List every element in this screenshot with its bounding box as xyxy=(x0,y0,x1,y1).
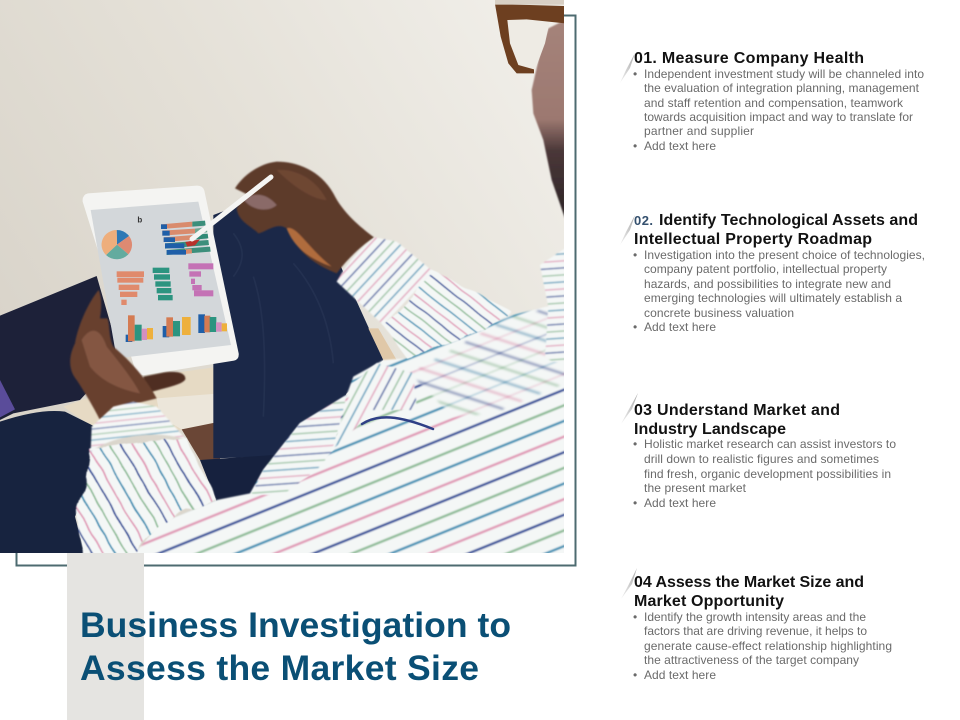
middle green bars xyxy=(153,268,173,300)
top bar chart xyxy=(161,221,211,255)
frame outline behind photo xyxy=(16,16,576,566)
body 02: Investigation into the present choice of technologies, xyxy=(644,248,925,262)
body 04: Add text here xyxy=(644,668,716,682)
stylus xyxy=(192,177,271,239)
slash accent 03 xyxy=(621,393,638,424)
body 01: and staff retention and compensation, teamwork xyxy=(644,96,904,110)
knuckle highlight xyxy=(82,331,140,393)
body 03: • xyxy=(633,437,637,451)
right hand holding stylus xyxy=(235,162,374,273)
heading 02: 02. xyxy=(634,213,653,228)
body 01: Add text here xyxy=(644,139,716,153)
body 03: Holistic market research can assist investors to xyxy=(644,437,896,451)
heading 01: 01. Measure Company Health xyxy=(634,50,864,67)
body 02: hazards, and possibilities to integrate new and xyxy=(644,277,891,291)
body 04: factors that are driving revenue, it helps to xyxy=(644,624,867,638)
photo: man using tablet xyxy=(0,0,565,555)
item 01: Measure Company Health xyxy=(620,50,924,153)
left hand holding tablet xyxy=(70,290,185,420)
body 01: • xyxy=(633,67,637,81)
upper left thigh xyxy=(0,276,120,420)
heading 03: Industry Landscape xyxy=(634,421,786,438)
tablet with charts xyxy=(83,186,239,375)
hand shape xyxy=(235,162,374,273)
trouser folds xyxy=(233,234,265,416)
body 02: • xyxy=(633,320,637,334)
body 03: the present market xyxy=(644,481,747,495)
body 01 xyxy=(633,67,924,153)
upper cuff xyxy=(337,237,433,325)
bottom column charts xyxy=(126,314,227,342)
middle purple bars xyxy=(188,263,213,296)
heading 03 xyxy=(634,402,840,438)
body 03: drill down to realistic figures and sometimes xyxy=(644,452,879,466)
right trouser leg xyxy=(213,200,383,483)
screen label: b xyxy=(137,216,142,225)
body 04 xyxy=(633,610,892,682)
man's head and glasses xyxy=(495,0,565,218)
body 04: Identify the growth intensity areas and the xyxy=(644,610,866,624)
body 02 xyxy=(633,248,925,334)
title xyxy=(80,605,511,688)
body 01: the evaluation of integration planning, management xyxy=(644,81,920,95)
lower sleeve xyxy=(75,437,217,555)
body 04: the attractiveness of the target company xyxy=(644,653,859,667)
lower connecting trouser xyxy=(200,455,273,502)
heading 02: Intellectual Property Roadmap xyxy=(634,231,872,248)
item 02: Identify Technological Assets xyxy=(620,212,925,334)
decorative grey strip behind title xyxy=(67,553,144,720)
palm xyxy=(70,290,157,420)
body 04: generate cause-effect relationship highlighting xyxy=(644,639,892,653)
glasses frame xyxy=(495,4,565,73)
heading 04 xyxy=(634,574,864,610)
body 03 xyxy=(633,437,896,510)
upper forearm sleeve xyxy=(383,272,510,358)
fingertip xyxy=(244,195,277,210)
slash accent 01 xyxy=(620,53,635,83)
striped shirt xyxy=(75,237,565,555)
highlight xyxy=(277,170,327,200)
slash accent 04 xyxy=(621,568,637,599)
wall background xyxy=(0,0,564,553)
body 03: Add text here xyxy=(644,496,716,510)
wall sliver beside trousers xyxy=(368,328,397,363)
heading 03: 03 Understand Market and xyxy=(634,402,840,419)
body 04: • xyxy=(633,668,637,682)
body 02: company patent portfolio, intellectual property xyxy=(644,262,887,276)
lower left leg xyxy=(0,411,95,555)
body 01: partner and supplier xyxy=(644,124,754,138)
body 03: find fresh, organic development possibilities in xyxy=(644,467,891,481)
lower cuff xyxy=(91,402,187,452)
left back segment xyxy=(252,395,347,497)
item 03: Understand Market and Industry Landscape xyxy=(621,393,896,510)
body 02: emerging technologies will ultimately establish a xyxy=(644,291,902,305)
heading 02 xyxy=(634,212,918,248)
body 01: towards acquisition impact and way to translate for xyxy=(644,110,913,124)
body 04: • xyxy=(633,610,637,624)
head xyxy=(532,20,565,218)
shoulder fold xyxy=(332,363,417,450)
heading 04: 04 Assess the Market Size and xyxy=(634,574,864,591)
middle salmon bars xyxy=(117,271,144,305)
slash accent 02 xyxy=(620,215,635,245)
pie chart xyxy=(102,230,132,259)
main back xyxy=(133,307,565,555)
top highlight xyxy=(495,0,565,5)
title: Assess the Market Size xyxy=(80,648,479,688)
tablet body xyxy=(83,186,239,375)
cream wall below thigh xyxy=(63,367,220,430)
body 01: Independent investment study will be channeled into xyxy=(644,67,924,81)
lens xyxy=(536,28,548,66)
upper back pale stripes xyxy=(410,308,565,417)
floor, baseboard and legs xyxy=(0,200,397,555)
floor xyxy=(182,422,220,460)
purple cuff xyxy=(0,380,15,417)
heading 02: Identify Technological Assets and xyxy=(659,212,918,229)
collar xyxy=(540,248,565,365)
thumb xyxy=(143,372,185,393)
body 02: • xyxy=(633,248,637,262)
item 04: Assess the Market Size and Opportunity xyxy=(621,568,892,682)
collar fold shadow xyxy=(362,417,433,429)
body 03: • xyxy=(633,496,637,510)
tablet screen xyxy=(91,202,231,358)
heading 04: Market Opportunity xyxy=(634,593,784,610)
body 01: • xyxy=(633,139,637,153)
warm palm shade xyxy=(287,228,332,267)
baseboard xyxy=(156,394,214,430)
body 02: Add text here xyxy=(644,320,716,334)
title: Business Investigation to xyxy=(80,605,511,645)
body 02: concrete business valuation xyxy=(644,306,794,320)
